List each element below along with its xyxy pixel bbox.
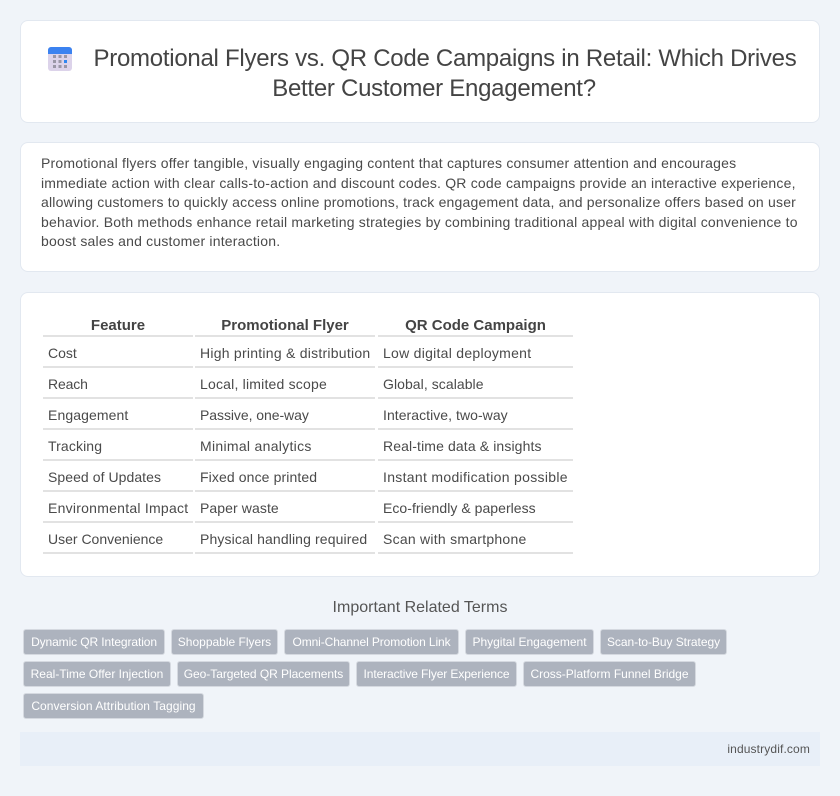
tag row 2: Real-Time Offer Injection [31,667,163,681]
tag row 1 [23,629,165,655]
comparison table: Paper waste [200,500,279,516]
tag row 1: Dynamic QR Integration [31,635,157,649]
comparison table [43,317,573,554]
comparison table: Real-time data & insights [383,438,542,454]
comparison table: Local, limited scope [200,376,327,392]
title: Promotional Flyers vs. QR Code Campaigns in Retail: Which Drives [94,45,796,72]
row: tracking [43,430,193,461]
table header [43,313,193,337]
row: reach [43,368,193,399]
comparison table: QR Code Campaign [405,317,546,334]
row: speed of updates [43,461,193,492]
row: user convenience: User Convenience [48,531,163,547]
row: reach: Reach [48,376,88,392]
tag row 2 [23,661,171,687]
comparison table: Minimal analytics [200,438,312,454]
tag row 3 [23,693,204,719]
intro paragraph [41,155,798,249]
comparison table: Interactive, two-way [383,407,508,423]
comparison table: Global, scalable [383,376,484,392]
comparison table: Physical handling required [200,531,367,547]
related term tags: Scan-to-Buy Strategy [607,635,720,649]
comparison table: Passive, one-way [200,407,309,423]
comparison table: High printing & distribution [200,345,370,361]
comparison table: Scan with smartphone [383,531,527,547]
comparison table: Instant modification possible [383,469,568,485]
footer bar [20,732,820,766]
related term tags: Omni-Channel Promotion Link [292,635,451,649]
intro paragraph: allowing customers to quickly access online promotions, track engagement data, and personalize offers based on user [41,194,796,210]
related term tags: Phygital Engagement [472,635,587,649]
related term tags: Cross-Platform Funnel Bridge [530,667,689,681]
row: engagement: Engagement [48,407,128,423]
related term tags: Shoppable Flyers [178,635,271,649]
related term tags: Geo-Targeted QR Placements [184,667,343,681]
intro paragraph: behavior. Both methods enhance retail marketing strategies by combining traditional appeal with digital convenience to [41,214,798,230]
source credit: industrydif.com [727,742,810,756]
comparison table: Promotional Flyer [221,317,349,334]
row: cost: Cost [48,345,77,361]
comparison table: Low digital deployment [383,345,531,361]
row: engagement [43,399,193,430]
row: cost [43,337,193,368]
heading: important related terms: Important Related Terms [333,599,507,616]
panel: comparison table [20,292,820,577]
intro paragraph: immediate action with clear calls-to-action and discount codes. QR code campaigns provide an interactive experience, [41,175,796,191]
comparison table: Fixed once printed [200,469,317,485]
intro paragraph: Promotional flyers offer tangible, visually engaging content that captures consumer attention and encourages [41,155,736,171]
title [94,45,796,102]
table header: Feature [91,317,145,334]
row: speed of updates: Speed of Updates [48,469,161,485]
comparison table: Eco-friendly & paperless [383,500,536,516]
panel: intro text [20,142,820,272]
tag row 3: Conversion Attribution Tagging [31,699,196,713]
related term tags: Interactive Flyer Experience [364,667,509,681]
row: environmental impact: Environmental Impact [48,500,188,516]
row: environmental impact [43,492,193,523]
row: user convenience [43,523,193,554]
row: tracking: Tracking [48,438,102,454]
intro paragraph: boost sales and customer interaction. [41,233,280,249]
title: Better Customer Engagement? [272,75,596,102]
title card [20,20,820,123]
icon: calendar [48,47,72,71]
